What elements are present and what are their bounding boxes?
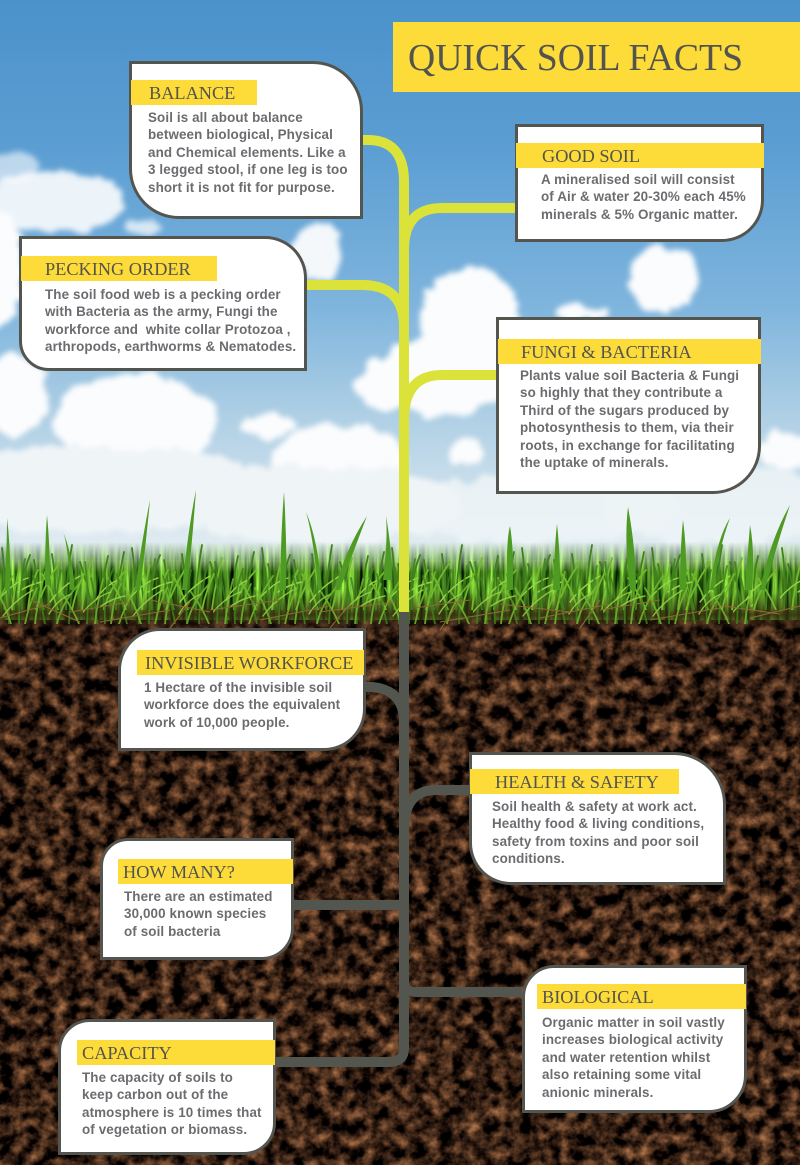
text: health and safety — [492, 799, 704, 866]
text: health and safety: conditions. — [492, 851, 565, 866]
text: capacity: keep carbon out of the — [82, 1087, 228, 1102]
panel: capacity — [58, 1019, 276, 1155]
text: pecking order: with Bacteria as the army, Fungi the — [45, 304, 278, 319]
text: fungi and bacteria: roots, in exchange for facilitating — [520, 438, 735, 453]
roots: dark below ground — [275, 612, 522, 1062]
title — [393, 22, 800, 92]
heading: how many — [118, 859, 293, 884]
heading: health and safety — [470, 769, 679, 794]
text: biological: Organic matter in soil vastly — [542, 1015, 725, 1030]
text: capacity — [82, 1070, 262, 1137]
text: good soil: of Air & water 20-30% each 45% — [541, 189, 746, 204]
text: biological: also retaining some vital — [542, 1067, 701, 1082]
soil — [0, 605, 800, 1165]
heading: good soil — [516, 143, 764, 168]
clouds — [0, 152, 800, 545]
text: health and safety: safety from toxins and poor soil — [492, 834, 699, 849]
heading: biological: BIOLOGICAL — [542, 987, 654, 1007]
heading: pecking order: PECKING ORDER — [45, 259, 191, 279]
heading: good soil: GOOD SOIL — [542, 146, 640, 166]
text: good soil: A mineralised soil will consist — [541, 172, 735, 187]
heading: health and safety: HEALTH & SAFETY — [495, 772, 659, 792]
panel: biological — [522, 965, 747, 1113]
heading: capacity — [77, 1040, 275, 1065]
text: how many: There are an estimated — [124, 889, 273, 904]
text: pecking order — [45, 287, 296, 354]
panel: good soil — [515, 124, 764, 242]
text: fungi and bacteria: Plants value soil Bacteria & Fungi — [520, 368, 739, 383]
text: how many: 30,000 known species — [124, 906, 266, 921]
text: biological: increases biological activity — [542, 1032, 723, 1047]
sky — [0, 0, 800, 560]
text: fungi and bacteria — [520, 368, 739, 470]
text: biological — [542, 1015, 725, 1100]
heading: balance — [131, 80, 257, 105]
text: balance: short it is not fit for purpose. — [148, 180, 335, 195]
text: invisible workforce: workforce does the equivalent — [144, 697, 340, 712]
text: good soil: minerals & 5% Organic matter. — [541, 207, 738, 222]
heading: biological — [537, 984, 746, 1009]
panel: how many — [100, 838, 294, 960]
panel: pecking order — [19, 236, 307, 371]
heading: balance: BALANCE — [149, 83, 235, 103]
panel: health and safety — [469, 752, 726, 885]
panel: balance — [129, 61, 363, 219]
text: health and safety: Soil health & safety at work act. — [492, 799, 697, 814]
panel: invisible workforce — [118, 628, 366, 751]
grass — [0, 490, 800, 632]
text: pecking order: The soil food web is a pecking order — [45, 287, 281, 302]
heading: invisible workforce: INVISIBLE WORKFORCE — [145, 653, 353, 673]
text: fungi and bacteria: photosynthesis to them, via their — [520, 420, 734, 435]
text: pecking order: workforce and white collar Protozoa , — [45, 322, 291, 337]
stem: green above ground — [307, 140, 515, 612]
heading: pecking order — [21, 256, 217, 281]
text: good soil — [541, 172, 746, 222]
title: QUICK SOIL FACTS — [408, 37, 743, 79]
text: how many: of soil bacteria — [124, 924, 220, 939]
text: how many — [124, 889, 273, 939]
text: balance: Soil is all about balance — [148, 110, 303, 125]
text: fungi and bacteria: Third of the sugars produced by — [520, 403, 729, 418]
text: invisible workforce: 1 Hectare of the invisible soil — [144, 680, 332, 695]
text: balance: 3 legged stool, if one leg is too — [148, 162, 348, 177]
text: invisible workforce: work of 10,000 people. — [144, 715, 290, 730]
text: balance: and Chemical elements. Like a — [148, 145, 346, 160]
text: fungi and bacteria: so highly that they contribute a — [520, 385, 722, 400]
text: pecking order: arthropods, earthworms & Nematodes. — [45, 339, 296, 354]
text: fungi and bacteria: the uptake of minerals. — [520, 455, 669, 470]
text: capacity: of vegetation or biomass. — [82, 1122, 247, 1137]
text: capacity: The capacity of soils to — [82, 1070, 233, 1085]
text: balance: between biological, Physical — [148, 127, 333, 142]
heading: capacity: CAPACITY — [82, 1043, 172, 1063]
text: biological: and water retention whilst — [542, 1050, 710, 1065]
text: capacity: atmosphere is 10 times that — [82, 1105, 262, 1120]
text: health and safety: Healthy food & living conditions, — [492, 816, 704, 831]
heading: how many: HOW MANY? — [123, 862, 235, 882]
text: balance — [148, 110, 348, 195]
panel: fungi and bacteria — [496, 317, 761, 494]
heading: fungi and bacteria: FUNGI & BACTERIA — [521, 342, 692, 362]
text: biological: anionic minerals. — [542, 1085, 653, 1100]
text: invisible workforce — [144, 680, 340, 730]
heading: fungi and bacteria — [498, 339, 761, 364]
